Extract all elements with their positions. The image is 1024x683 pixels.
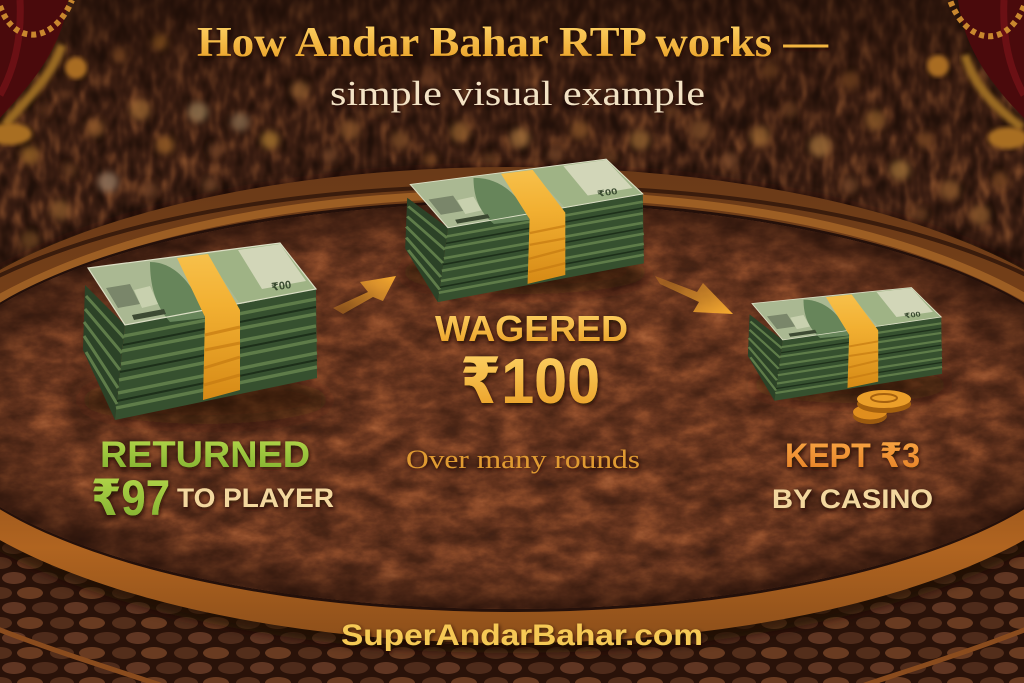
label: kept by casino <box>772 437 933 514</box>
background: bokeh casino wall <box>0 0 1024 320</box>
footer: website: SuperAndarBahar.com <box>341 619 703 652</box>
floor: pebble carpet <box>0 420 1024 683</box>
label: returned to player: RETURNED <box>100 434 310 475</box>
label: wagered: ₹100 <box>460 345 600 417</box>
panel: oval table <box>0 167 1024 653</box>
arrow: wagered to kept <box>655 276 733 314</box>
curtain: top left <box>0 0 87 145</box>
money stack: kept by casino <box>748 288 950 403</box>
money stack: returned to player <box>80 243 330 424</box>
label: wagered <box>435 308 628 417</box>
caption: over many rounds: Over many rounds <box>406 445 640 474</box>
label: kept by casino: BY CASINO <box>772 484 933 514</box>
money stack: wagered <box>400 158 650 303</box>
title: How Andar Bahar RTP works — <box>197 20 829 66</box>
label: kept by casino: KEPT ₹3 <box>785 437 920 475</box>
arrow: returned to wagered <box>333 276 396 314</box>
label: returned to player: ₹97 <box>91 470 170 526</box>
label: returned to player: TO PLAYER <box>177 483 334 513</box>
icon: gold coins <box>853 390 911 424</box>
curtain: top right <box>927 0 1024 149</box>
label: returned to player <box>91 434 334 526</box>
subtitle: simple visual example <box>330 74 705 113</box>
label: wagered: WAGERED <box>435 308 628 349</box>
